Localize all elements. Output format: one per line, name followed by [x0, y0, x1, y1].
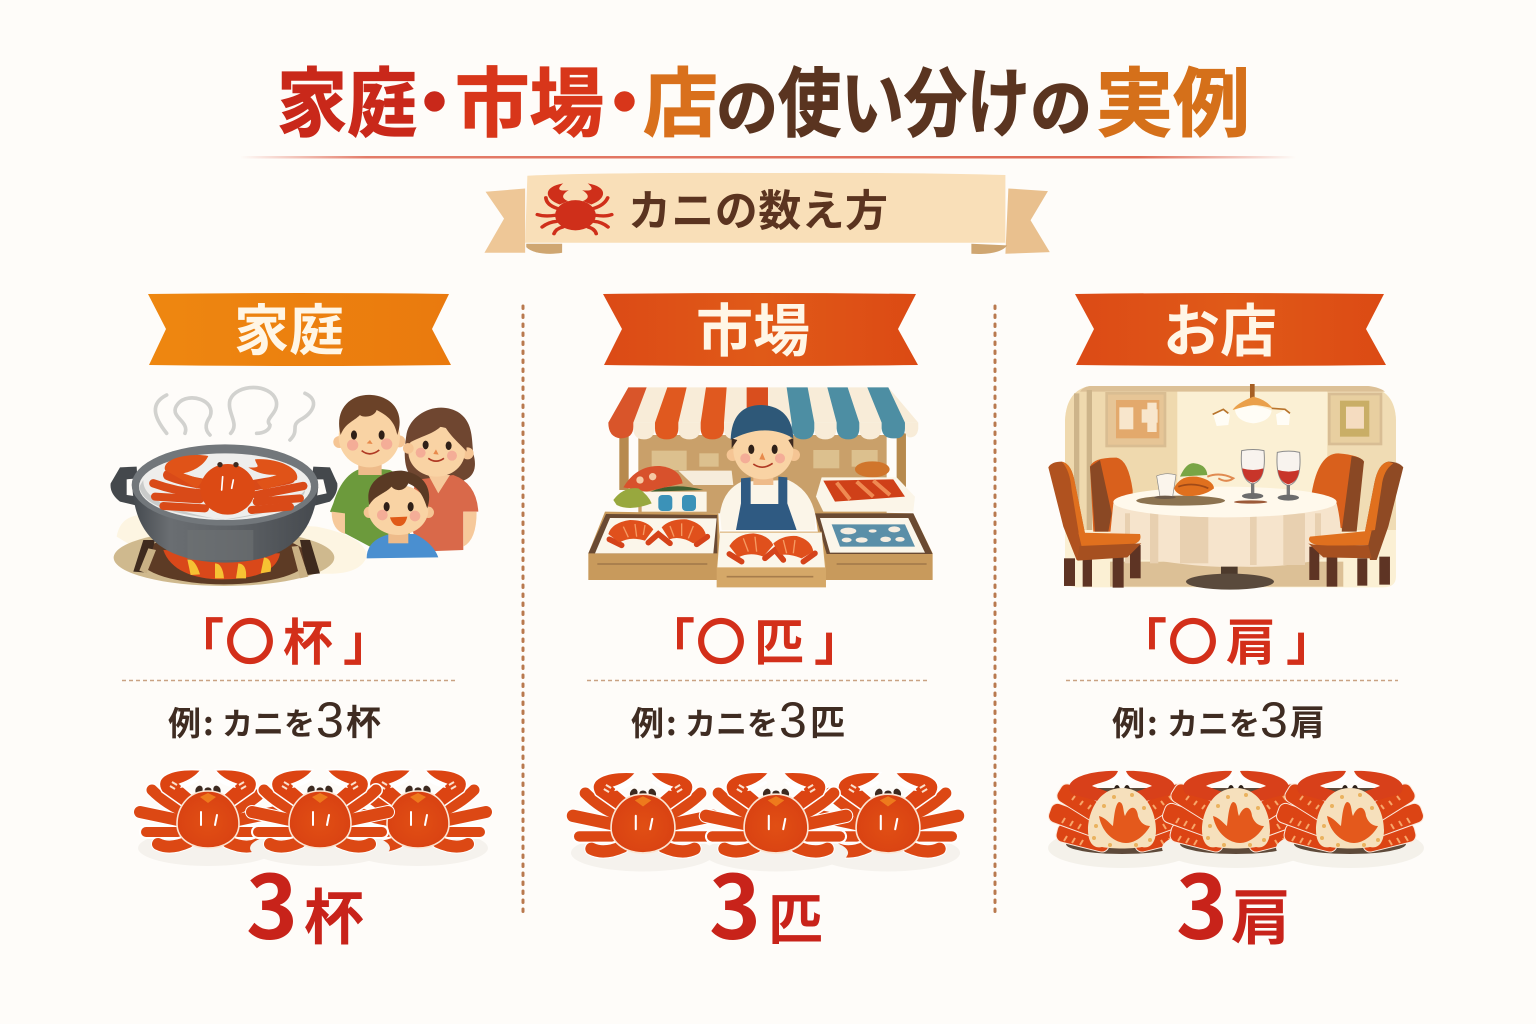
heading ribbon: market: 市場 — [696, 286, 810, 368]
crab in pot — [153, 475, 303, 510]
panel: home — [111, 286, 488, 965]
big count: restaurant: 肩 — [1231, 870, 1291, 957]
title: 実例 — [1096, 43, 1250, 152]
example sentence: market: : — [666, 697, 677, 745]
example sentence: home: : — [203, 697, 214, 745]
title: ・ — [397, 43, 472, 152]
pot — [111, 467, 138, 506]
crab row: restaurant — [1047, 771, 1425, 868]
counter label: restaurant: 「 — [1117, 603, 1167, 675]
back chairs — [1090, 458, 1133, 532]
counter label: home: 〇 — [225, 603, 275, 675]
example sentence: restaurant: 例 — [1112, 697, 1145, 745]
illustration: market stall — [588, 387, 933, 587]
big count: market: 3 — [709, 838, 761, 965]
vendor — [720, 480, 815, 530]
counter label: restaurant: 」 — [1286, 603, 1336, 675]
counter label: market: 「 — [645, 603, 695, 675]
counter label: restaurant: 肩 — [1226, 603, 1276, 675]
left goods — [623, 466, 683, 492]
counter label: market: 」 — [814, 603, 864, 675]
title: ・ — [587, 43, 662, 152]
subtitle ribbon: カニの数え方 — [628, 177, 888, 239]
table — [1108, 503, 1342, 567]
example sentence: home: カニを — [222, 699, 315, 744]
steam — [155, 387, 314, 440]
icon: crab — [537, 183, 612, 234]
chandelier — [1250, 384, 1255, 398]
counter label: restaurant: 〇 — [1168, 603, 1218, 675]
example sentence: restaurant: 3 — [1260, 692, 1288, 748]
example sentence: restaurant: カニを — [1167, 699, 1260, 744]
front chairs — [1064, 545, 1141, 588]
counter label: market: 匹 — [754, 603, 804, 675]
heading ribbon: restaurant: お店 — [1163, 286, 1277, 368]
example sentence: market: 3 — [779, 692, 807, 748]
heading ribbon: restaurant — [1075, 286, 1386, 368]
heading ribbon: home — [148, 286, 451, 366]
counter label: home: 杯 — [283, 603, 333, 675]
column dividers — [523, 306, 995, 916]
title: 店 — [643, 43, 718, 152]
title: 市場 — [455, 43, 604, 152]
crab row: home — [138, 770, 488, 866]
crab row: market — [571, 772, 960, 871]
family — [330, 395, 478, 558]
awning — [608, 387, 918, 439]
big count: home: 杯 — [304, 870, 364, 957]
example sentence: market: カニを — [685, 699, 778, 744]
big count: home: 3 — [246, 838, 298, 965]
big count: market: 匹 — [768, 875, 823, 955]
title: の — [1030, 58, 1092, 148]
title — [277, 43, 1250, 152]
example sentence: restaurant: 肩 — [1290, 695, 1325, 746]
counter label: home: 「 — [174, 603, 224, 675]
example sentence: market: 匹 — [810, 695, 845, 746]
example sentence: home: 杯 — [346, 695, 381, 746]
counter label: market: 〇 — [696, 603, 746, 675]
counter label: home: 」 — [343, 603, 393, 675]
illustration: family watching crab hot pot — [111, 387, 478, 586]
subtitle ribbon — [484, 173, 1050, 254]
example sentence: market: 例 — [631, 697, 664, 745]
crates — [588, 512, 722, 580]
panel: market — [571, 286, 960, 965]
example sentence: restaurant: : — [1147, 697, 1158, 745]
title: の — [716, 58, 778, 148]
plate food — [1180, 463, 1207, 477]
wine glasses — [1241, 449, 1300, 501]
big count: restaurant: 3 — [1176, 838, 1228, 965]
title: 家庭 — [277, 43, 417, 152]
illustration: restaurant table — [1048, 384, 1403, 590]
panel: restaurant — [1047, 286, 1425, 965]
example sentence: home: 例 — [168, 697, 201, 745]
heading ribbon: market — [603, 286, 918, 368]
crab legs in crates — [609, 534, 815, 562]
right goods — [855, 461, 890, 477]
title: 使い分け — [778, 43, 1030, 152]
example sentence: home: 3 — [316, 692, 344, 748]
heading ribbon: home: 家庭 — [234, 286, 344, 366]
